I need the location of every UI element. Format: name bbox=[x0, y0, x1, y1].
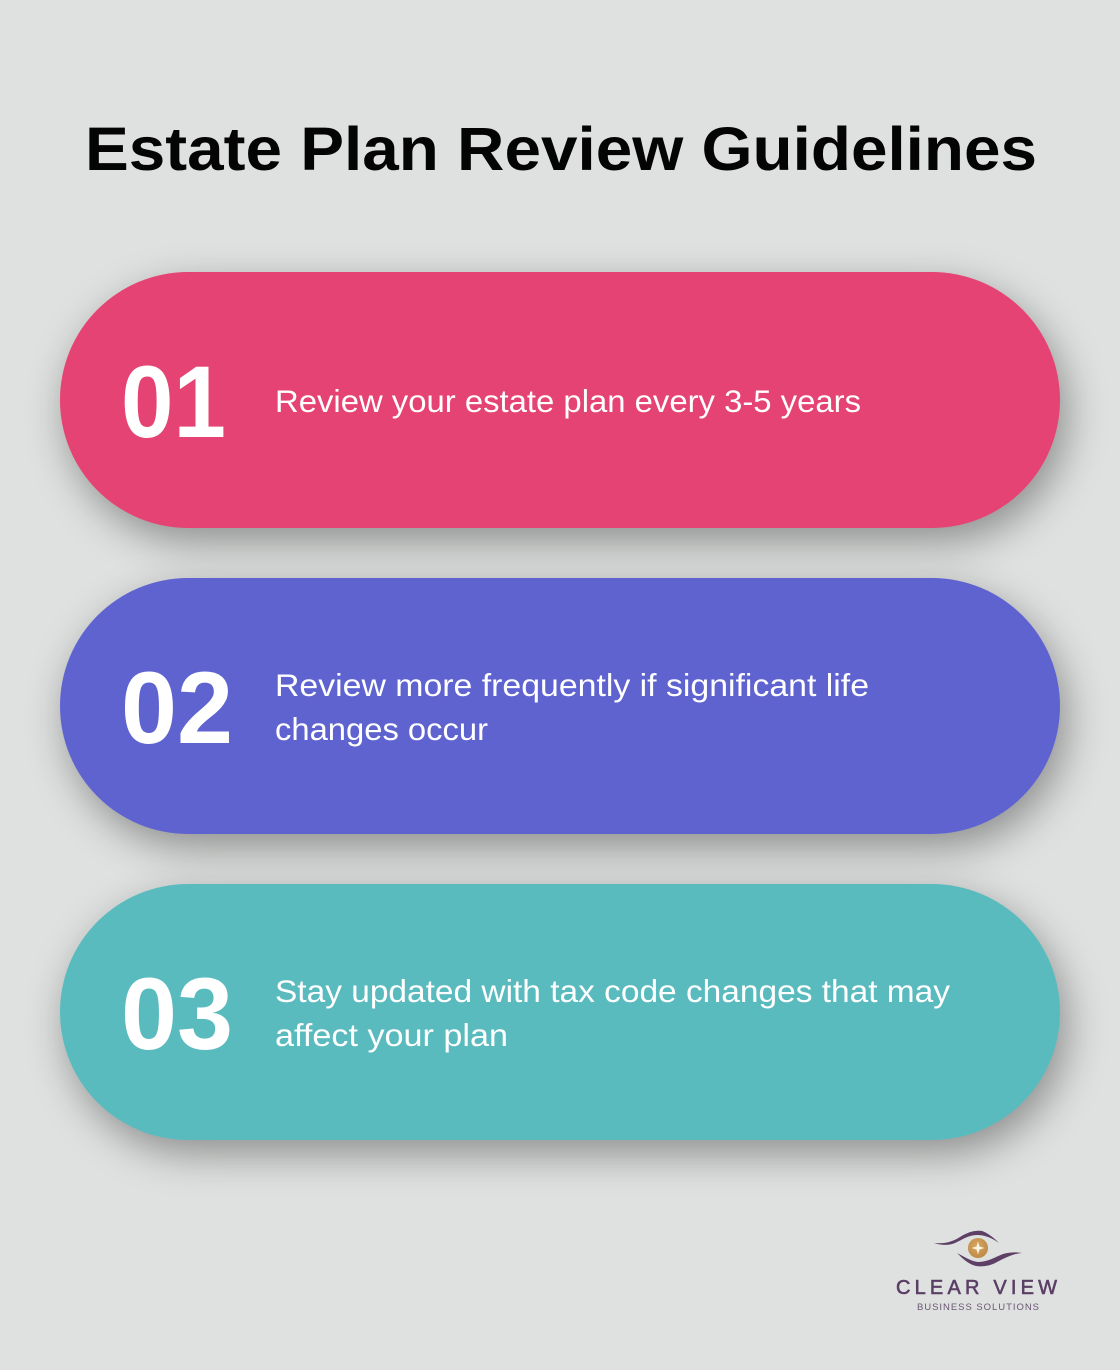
wordmark: CLEAR VIEW bbox=[896, 1277, 1057, 1299]
number 03: 03 bbox=[121, 957, 233, 1071]
pill: step 02 background bbox=[60, 578, 1060, 834]
text: step 03: affect your plan bbox=[275, 1017, 508, 1053]
text: step 02 bbox=[275, 667, 869, 747]
panel: step 03 bbox=[60, 884, 1060, 1140]
logo: Clear View Business Solutions bbox=[896, 1231, 1057, 1313]
number 02: 02 bbox=[121, 651, 233, 765]
icon: eye bbox=[934, 1231, 1022, 1266]
number 01: 01 bbox=[121, 345, 226, 459]
panel: step 02 bbox=[60, 578, 1060, 834]
text: step 03 bbox=[275, 973, 950, 1053]
text: step 02: Review more frequently if significant life bbox=[275, 667, 869, 703]
pill: step 01 background bbox=[60, 272, 1060, 528]
pill: step 03 background bbox=[60, 884, 1060, 1140]
title: Estate Plan Review Guidelines bbox=[85, 115, 1037, 183]
text: step 03: Stay updated with tax code changes that may bbox=[275, 973, 950, 1009]
panel: step 01 bbox=[60, 272, 1060, 528]
text: step 02: changes occur bbox=[275, 711, 488, 747]
tagline: BUSINESS SOLUTIONS bbox=[917, 1302, 1039, 1313]
text: step 01: Review your estate plan every 3-5 years bbox=[275, 383, 861, 419]
